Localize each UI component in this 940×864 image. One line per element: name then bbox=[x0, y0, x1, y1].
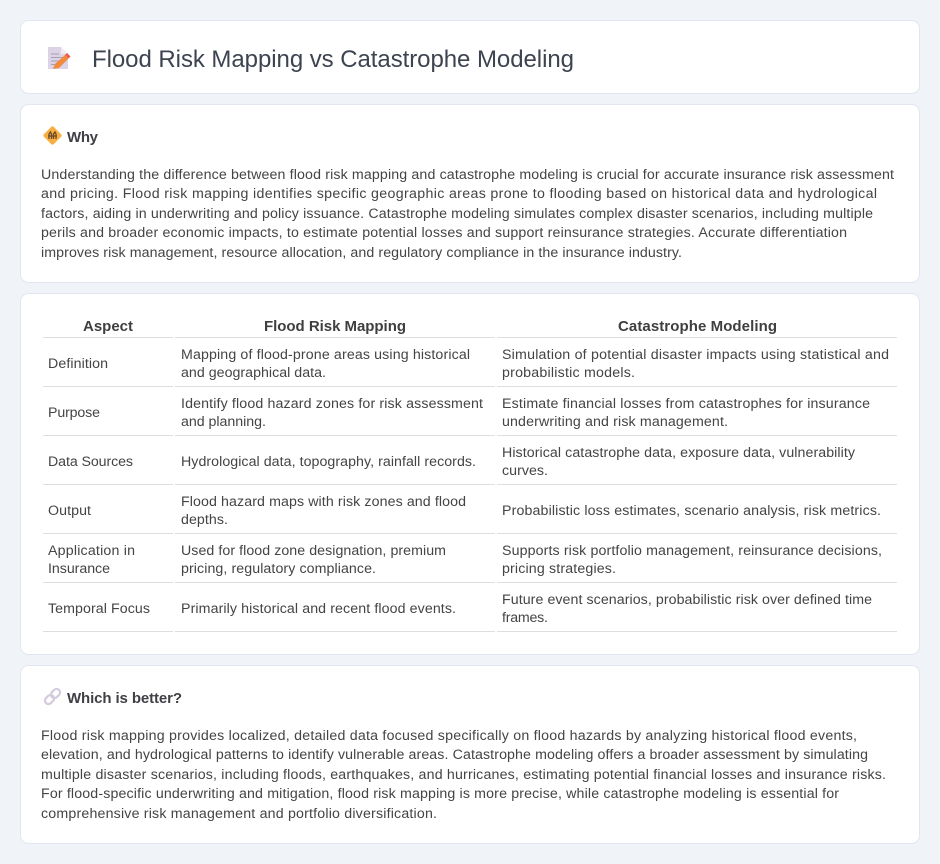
row: definition: Simulation of potential disaster impacts using statistical and bbox=[502, 347, 889, 363]
row: application in insurance: Insurance bbox=[48, 561, 110, 577]
text block: why: Understanding the difference between flood risk mapping and catastrophe modeling is crucial for accurate insurance risk assessment bbox=[41, 167, 894, 183]
text block: which is better: For flood-specific underwriting and mitigation, flood risk mapping is more precise, while catastrophe modeling is essential for bbox=[41, 786, 839, 802]
icon: document with pencil bbox=[48, 47, 70, 69]
row: application in insurance: pricing strategies. bbox=[502, 561, 616, 577]
panel: header bbox=[20, 20, 920, 94]
row: application in insurance: Supports risk portfolio management, reinsurance decisions, bbox=[502, 543, 882, 559]
row: purpose: Identify flood hazard zones for risk assessment bbox=[181, 396, 483, 412]
icon: warning diamond bbox=[43, 126, 62, 145]
panel: why bbox=[20, 104, 920, 282]
row: purpose: Purpose bbox=[48, 405, 100, 421]
panel: which is better bbox=[20, 666, 920, 844]
row: definition bbox=[48, 347, 889, 381]
text block: which is better: Flood risk mapping provides localized, detailed data focused specifically on flood hazards by analyzing historical flood events, bbox=[41, 728, 857, 744]
row: application in insurance: pricing, regulatory compliance. bbox=[181, 561, 376, 577]
row: application in insurance: Application in bbox=[48, 543, 135, 559]
table header row: Aspect bbox=[83, 318, 133, 335]
row: output: Output bbox=[48, 503, 91, 519]
table header row: Catastrophe Modeling bbox=[618, 318, 777, 335]
row: temporal focus: Future event scenarios, probabilistic risk over defined time bbox=[502, 592, 872, 608]
row: application in insurance bbox=[48, 543, 882, 577]
row: data sources: Hydrological data, topography, rainfall records. bbox=[181, 454, 476, 470]
text block: why bbox=[41, 167, 894, 261]
row: purpose: and planning. bbox=[181, 414, 266, 430]
text block: which is better: multiple disaster scenarios, including floods, earthquakes, and hurricanes, estimating potential financial losses and insurance risks. bbox=[41, 767, 886, 783]
row: temporal focus: frames. bbox=[502, 610, 548, 626]
row: purpose: underwriting and risk management. bbox=[502, 414, 728, 430]
heading: why: Why bbox=[67, 129, 99, 146]
row: definition: Mapping of flood-prone areas using historical bbox=[181, 347, 470, 363]
text block: which is better bbox=[41, 728, 886, 822]
text block: why: improves risk management, resource allocation, and regulatory compliance in the insurance industry. bbox=[41, 245, 682, 261]
text block: which is better: elevation, and hydrological patterns to identify vulnerable areas. Catastrophe modeling offers a broader assessment by simulating bbox=[41, 747, 868, 763]
icon: link bbox=[43, 687, 62, 706]
text block: why: perils and broader economic impacts, to estimate potential losses and support reinsurance strategies. Accurate differentiation bbox=[41, 225, 847, 241]
row: temporal focus bbox=[48, 592, 872, 626]
row: data sources: Data Sources bbox=[48, 454, 133, 470]
row: output: Probabilistic loss estimates, scenario analysis, risk metrics. bbox=[502, 503, 881, 519]
row: purpose bbox=[48, 396, 870, 430]
title: Flood Risk Mapping vs Catastrophe Modeling bbox=[92, 46, 574, 73]
row: output bbox=[48, 494, 881, 528]
text block: which is better: comprehensive risk management and portfolio diversification. bbox=[41, 806, 437, 822]
row: data sources bbox=[48, 445, 856, 479]
panel: comparison table bbox=[20, 294, 920, 654]
row: purpose: Estimate financial losses from catastrophes for insurance bbox=[502, 396, 870, 412]
row: definition: probabilistic models. bbox=[502, 365, 635, 381]
table header row bbox=[83, 318, 777, 335]
heading: which is better: Which is better? bbox=[67, 690, 182, 707]
row: data sources: Historical catastrophe data, exposure data, vulnerability bbox=[502, 445, 856, 461]
row: application in insurance: Used for flood zone designation, premium bbox=[181, 543, 446, 559]
row: data sources: curves. bbox=[502, 463, 548, 479]
row: output: depths. bbox=[181, 512, 228, 528]
row: temporal focus: Temporal Focus bbox=[48, 601, 150, 617]
row: temporal focus: Primarily historical and recent flood events. bbox=[181, 601, 456, 617]
table header row: Flood Risk Mapping bbox=[264, 318, 406, 335]
row: definition: and geographical data. bbox=[181, 365, 326, 381]
text block: why: and pricing. Flood risk mapping identifies specific geographic areas prone to flooding based on historical data and hydrological bbox=[41, 186, 877, 202]
text block: why: factors, aiding in underwriting and policy issuance. Catastrophe modeling simulates complex disaster scenarios, including multiple bbox=[41, 206, 873, 222]
row: definition: Definition bbox=[48, 356, 108, 372]
row: output: Flood hazard maps with risk zones and flood bbox=[181, 494, 466, 510]
